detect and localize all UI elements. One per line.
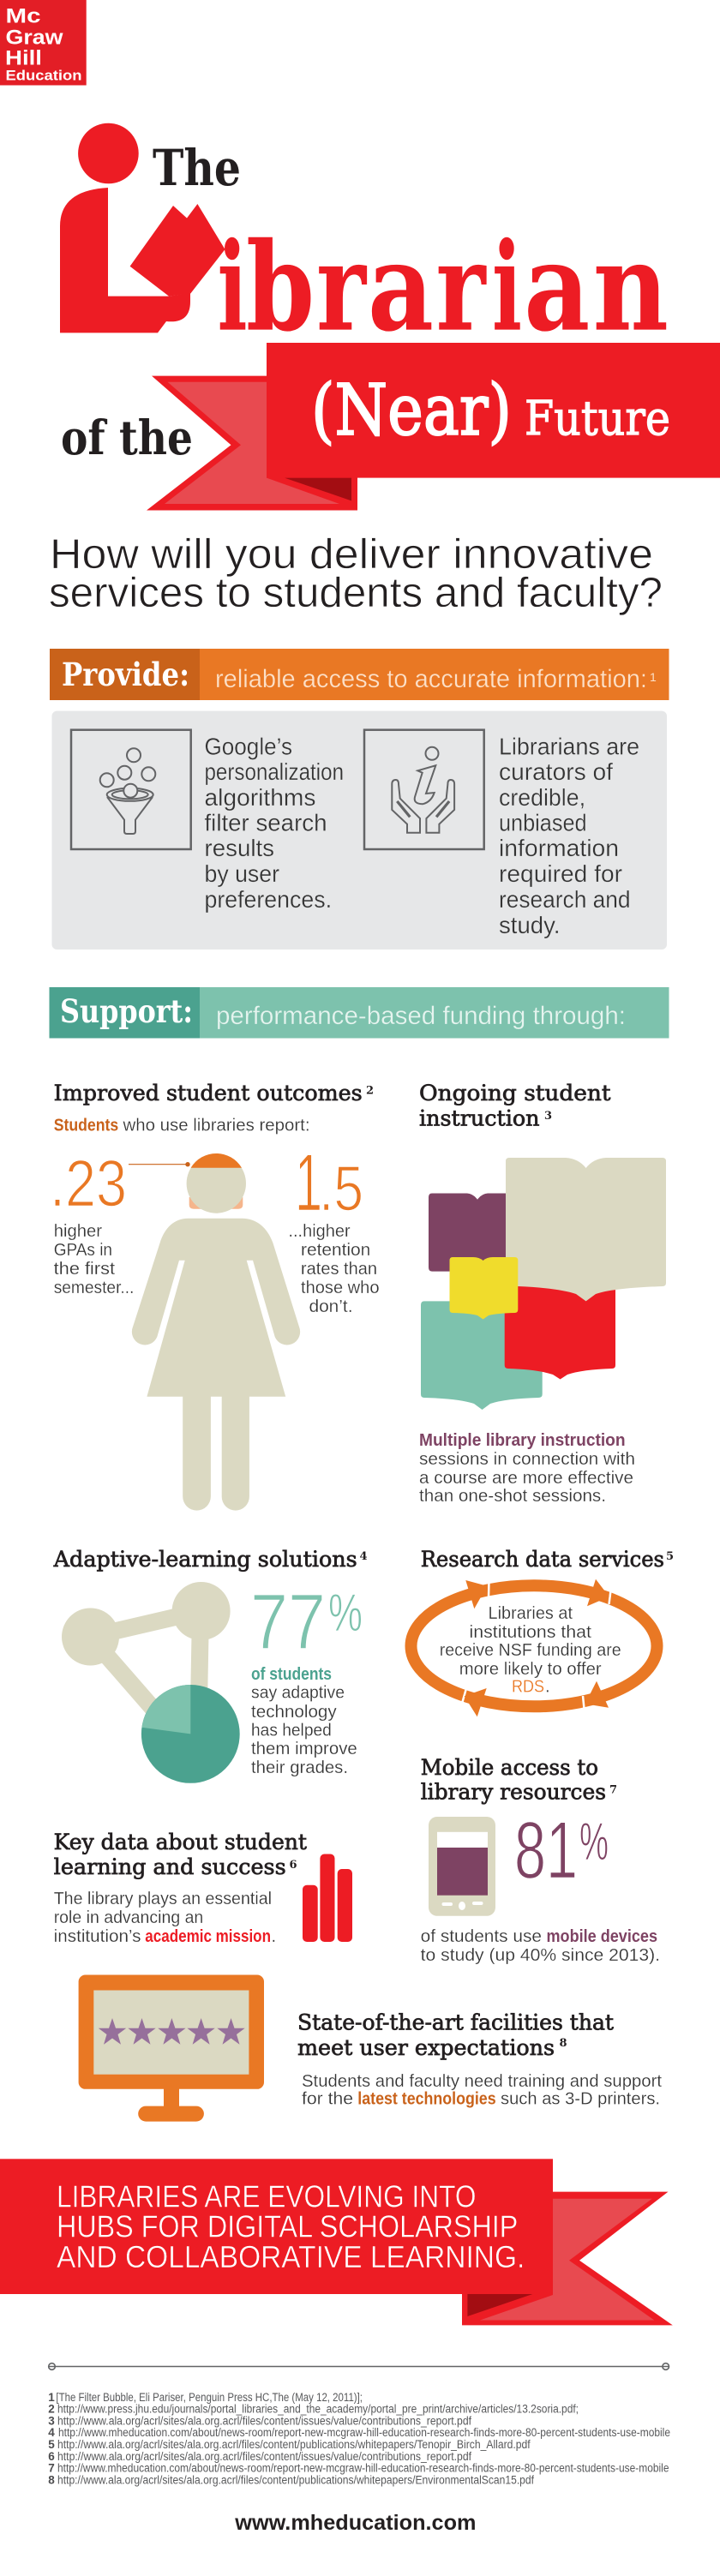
text: libraries at institutions: . [545, 1676, 550, 1696]
stat: 1.5: .5 [319, 1153, 363, 1224]
heading: 5 [666, 1550, 674, 1563]
text: libraries are evolving: LIBRARIES ARE EVOLVING INTO [57, 2179, 477, 2214]
question headline: How will you deliver innovative [50, 531, 653, 578]
text: students use mobile devices: of students use [421, 1926, 542, 1946]
section bar: Support: Support: [60, 992, 193, 1030]
text: higher retention: ...higher [288, 1221, 351, 1241]
text: libraries at institutions: Libraries at [489, 1603, 573, 1623]
footnotes: 6 [48, 2450, 55, 2463]
section bar: Provide: reliable access to accurate information: [215, 665, 647, 693]
heading word: ibrarian [218, 217, 669, 359]
text: Google personalization [204, 734, 344, 913]
text: Google personalization: personalization [204, 758, 344, 785]
closing ribbon banner [0, 2159, 673, 2325]
text: higher GPAs: GPAs in [54, 1240, 112, 1260]
text: multiple library instruction: a course are more effective [419, 1468, 633, 1488]
heading: Research data services [421, 1547, 664, 1572]
text: training and support: for the [302, 2088, 353, 2108]
text: of students say adaptive technology: say adaptive [251, 1683, 345, 1703]
heading word: Future: Future [525, 391, 670, 446]
icon: woman figure with orange hair segment [129, 1153, 300, 1511]
icon: network of nodes with pie chart [62, 1582, 240, 1783]
bar chart icon [303, 1854, 352, 1942]
text: higher GPAs: the first [54, 1259, 115, 1279]
heading: learning and success [54, 1854, 286, 1879]
text: librarians are curators: unbiased [499, 810, 587, 836]
text: students use mobile devices [421, 1926, 660, 1965]
text: librarians are curators: research and [499, 886, 631, 913]
heading word: ibrarian: i [492, 217, 522, 359]
section bar: Provide: Provide: [62, 656, 189, 693]
text: higher GPAs [54, 1221, 134, 1297]
text: the library plays an essential role: role in advancing an [54, 1908, 203, 1927]
heading word: ibrarian: b [246, 217, 315, 359]
text: librarians are curators: study. [499, 912, 561, 938]
heading: meet user expectations [297, 2035, 555, 2060]
footnotes [48, 2391, 670, 2487]
heading: 4 [360, 1550, 368, 1563]
text: libraries at institutions: institutions that [470, 1622, 591, 1642]
text: higher retention: those who [301, 1278, 379, 1297]
question headline [49, 531, 663, 616]
heading words: of the: of the [61, 410, 193, 465]
text: students use mobile devices: to study (up 40% since 2013). [421, 1945, 660, 1965]
footnotes: 2 [48, 2403, 55, 2416]
heading word: The: The [153, 139, 241, 197]
text: librarians are curators: curators of [499, 758, 613, 785]
footnotes: 1 [48, 2391, 55, 2404]
heading: 7 [609, 1784, 617, 1797]
text: Google personalization: preferences. [204, 886, 332, 913]
text: multiple library instruction: Multiple library instruction [419, 1430, 626, 1450]
stat: 81%: 81 [514, 1805, 578, 1896]
text: higher retention: retention [301, 1240, 370, 1260]
footnotes: http://www.ala.org/acrl/sites/ala.org.acrl/files/content/issues/value/contributions_report.pdf [57, 2450, 471, 2463]
heading: 8 [559, 2037, 567, 2050]
text: training and support: Students and faculty need training and support [302, 2071, 662, 2091]
text: higher retention: rates than [301, 1259, 377, 1279]
text: of students say adaptive technology: of students [251, 1664, 332, 1684]
text: of students say adaptive technology [251, 1664, 357, 1777]
footnotes: http://www.ala.org/acrl/sites/ala.org.acrl/files/content/publications/whitepapers/EnvironmentalScan15.pdf [57, 2474, 534, 2487]
text: Google personalization: filter search [204, 810, 327, 836]
ribbon tail [147, 376, 357, 511]
heading word: ibrarian: n [593, 217, 669, 359]
subheading: who use libraries report: [123, 1115, 310, 1135]
text: Google personalization: results [204, 835, 274, 861]
stat: .23: .23 [50, 1147, 127, 1220]
text: students use mobile devices: mobile devices [547, 1926, 657, 1946]
text: higher retention [288, 1221, 379, 1316]
text: the library plays an essential role: The library plays an essential [54, 1889, 272, 1908]
footnotes: http://www.ala.org/acrl/sites/ala.org.acrl/files/content/publications/whitepapers/Tenopir_Birch_Allard.pdf [57, 2438, 531, 2451]
text: the library plays an essential role: institution’s [54, 1926, 141, 1946]
heading word: (Near): (Near) [311, 370, 512, 452]
stat: 77%: 77 [250, 1579, 326, 1666]
text: multiple library instruction: than one-shot sessions. [419, 1486, 606, 1506]
panel: key data about student learning [54, 1830, 352, 1946]
text: higher retention: don’t. [309, 1297, 353, 1316]
text: higher GPAs: semester... [54, 1278, 134, 1297]
website address: www.mheducation.com [234, 2511, 477, 2535]
text: librarians are curators [499, 734, 639, 938]
panel: state-of-the-art facilities [79, 1974, 662, 2122]
text: of students say adaptive technology: technology [251, 1702, 337, 1722]
text: the library plays an essential role: academic mission [145, 1926, 271, 1946]
heading: Mobile access to [421, 1755, 598, 1780]
stat: 77%: % [328, 1584, 363, 1643]
question headline: services to students and faculty? [49, 570, 663, 616]
icon: monitor with five stars [79, 1974, 264, 2122]
footnotes: 8 [48, 2474, 55, 2487]
footnotes: http://www.ala.org/acrl/sites/ala.org.acrl/files/content/issues/value/contributions_report.pdf [57, 2415, 471, 2428]
section bar: Support [50, 987, 669, 1039]
stat: 1.5: 1 [295, 1137, 322, 1228]
section bar: Provide [50, 649, 669, 700]
heading [54, 1830, 307, 1879]
text: libraries are evolving: AND COLLABORATIVE LEARNING. [57, 2239, 525, 2274]
section bar: Support: performance-based funding through: [216, 1002, 626, 1030]
text: the library plays an essential role: . [271, 1926, 276, 1946]
ribbon banner [267, 343, 720, 478]
text: Google personalization: algorithms [204, 784, 315, 811]
panel: mobile access [421, 1755, 660, 1965]
heading: State-of-the-art facilities that [297, 2010, 614, 2034]
heading word: ibrarian: a [368, 217, 434, 359]
text: multiple library instruction [419, 1430, 635, 1506]
panel: improved student outcomes [50, 1081, 379, 1511]
section bar: Provide: 1 [650, 670, 657, 684]
stat: 1.5 [295, 1137, 363, 1228]
text: librarians are curators: Librarians are [499, 734, 639, 759]
text: Google personalization: Google’s [204, 734, 292, 759]
heading: library resources [421, 1780, 606, 1805]
subheading: Students [54, 1115, 118, 1135]
divider line [49, 2363, 669, 2369]
title block [60, 123, 720, 510]
heading word: ibrarian: a [524, 217, 590, 359]
footnotes: 7 [48, 2462, 55, 2475]
text: libraries are evolving: HUBS FOR DIGITAL SCHOLARSHIP [57, 2209, 518, 2244]
logo: McGraw-Hill Education: Hill [5, 47, 42, 70]
heading: 3 [544, 1110, 552, 1123]
footnotes: 3 [48, 2415, 55, 2428]
heading word: ibrarian: r [316, 217, 368, 359]
logo: McGraw-Hill Education: Mc [5, 5, 41, 28]
icon: funnel filtering balls [71, 730, 191, 849]
heading: Improved student outcomes [54, 1081, 363, 1105]
panel: research data services [411, 1547, 674, 1716]
icon: stack of coloured books [421, 1158, 666, 1410]
text: libraries at institutions: RDS [512, 1676, 544, 1696]
text: of students say adaptive technology: has helped [251, 1720, 332, 1740]
text: of students say adaptive technology: their grades. [251, 1758, 348, 1777]
heading: Key data about student [54, 1830, 307, 1854]
text: libraries at institutions: receive NSF funding are [440, 1640, 621, 1660]
text: higher GPAs: higher [54, 1221, 102, 1241]
logo: McGraw-Hill Education: Graw [5, 27, 64, 50]
footnotes: 5 [48, 2438, 55, 2451]
icon: hands holding information i [364, 730, 484, 849]
text: librarians are curators: information [499, 835, 619, 861]
text: the library plays an essential role [54, 1889, 276, 1946]
heading word: ibrarian: i [218, 217, 248, 359]
logo: McGraw-Hill Education: Education [5, 67, 82, 83]
text: of students say adaptive technology: them improve [251, 1739, 357, 1758]
footnotes: [The Filter Bubble, Eli Pariser, Penguin Press HC,The (May 12, 2011)]; [56, 2391, 363, 2404]
text: multiple library instruction: sessions in connection with [419, 1449, 635, 1469]
heading: 2 [366, 1085, 374, 1097]
heading [419, 1081, 610, 1131]
logo: McGraw-Hill Education [0, 0, 87, 86]
panel: ongoing student instruction [419, 1081, 666, 1506]
text: training and support [302, 2071, 662, 2108]
icon: smartphone with fill level [429, 1817, 495, 1916]
heading [421, 1755, 617, 1805]
text: librarians are curators: required for [499, 860, 622, 887]
text: libraries at institutions [440, 1603, 621, 1696]
footnotes: http://www.press.jhu.edu/journals/portal_libraries_and_the_academy/portal_pre_print/archive/articles/13.2soria.pdf; [57, 2403, 579, 2416]
heading word: ibrarian: r [435, 217, 487, 359]
text: libraries are evolving [57, 2179, 525, 2274]
panel: adaptive-learning solutions [53, 1547, 368, 1783]
heading: Adaptive-learning solutions [53, 1547, 357, 1572]
text: libraries at institutions: more likely to offer [459, 1659, 602, 1679]
panel: provide details [51, 711, 667, 950]
heading: instruction [419, 1106, 540, 1131]
icon: reading figure forming the letter L [60, 123, 225, 332]
text: training and support: such as 3-D printers. [501, 2088, 660, 2108]
footnotes: 4 [48, 2426, 55, 2439]
stat: 81%: % [579, 1812, 609, 1872]
text: Google personalization: by user [204, 860, 279, 887]
icon: circular arrows [411, 1579, 657, 1716]
heading [297, 2010, 614, 2060]
heading: Ongoing student [419, 1081, 610, 1105]
heading: 6 [290, 1859, 297, 1872]
text: librarians are curators: credible, [499, 784, 585, 811]
text: training and support: latest technologies [357, 2088, 496, 2108]
